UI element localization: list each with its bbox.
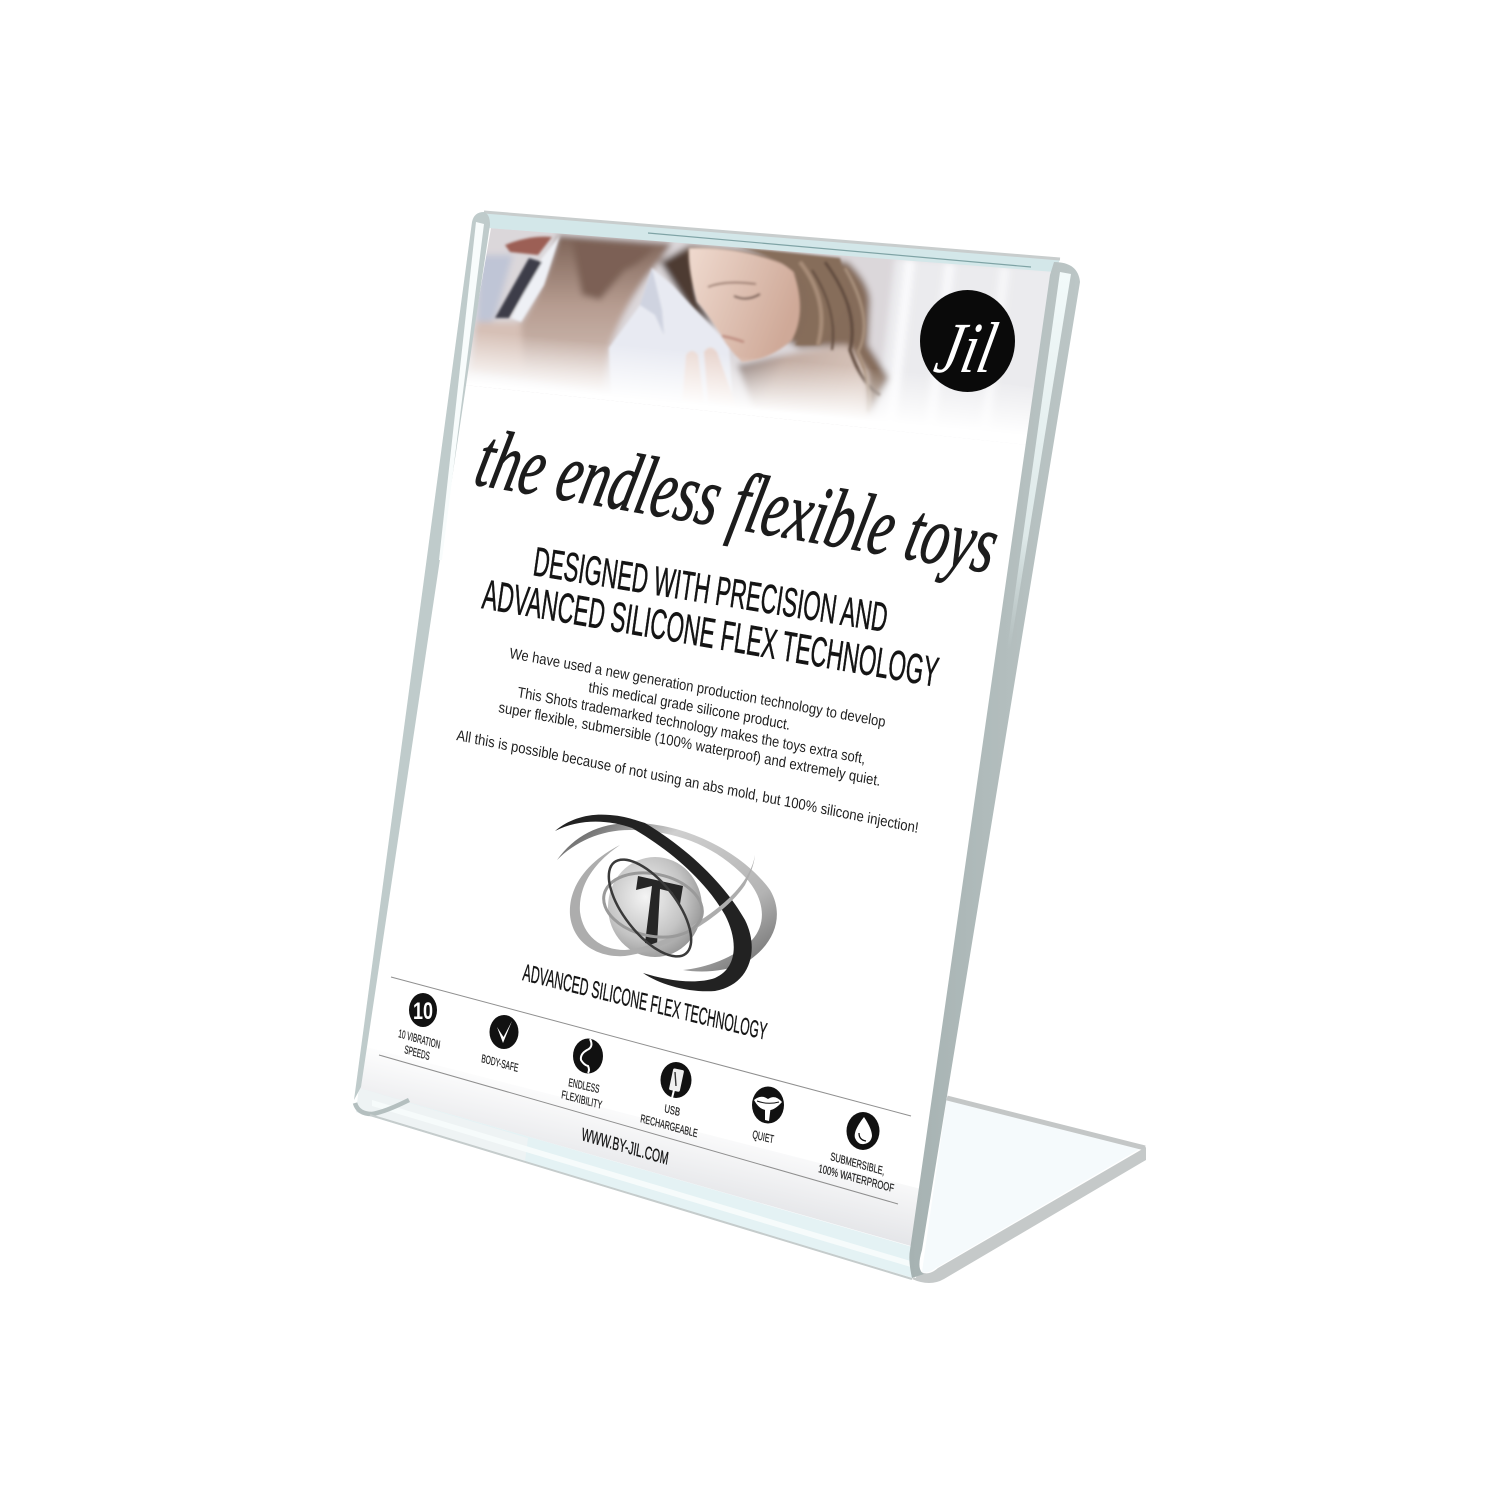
logo middle ring bbox=[570, 845, 755, 956]
feature: body-safe bbox=[481, 1015, 519, 1075]
technology logo: sphere with T and orbit rings bbox=[555, 815, 777, 991]
heading bbox=[480, 538, 942, 696]
feature: 10 vibration speeds bbox=[398, 993, 441, 1063]
sign bottom edge bbox=[370, 1115, 912, 1279]
logo black swoosh bbox=[555, 815, 752, 991]
logo caption: ADVANCED SILICONE FLEX TECHNOLOGY bbox=[521, 959, 769, 1046]
printed sign sheet bbox=[356, 215, 1080, 1278]
body text: this medical grade silicone product. bbox=[587, 679, 791, 734]
website: WWW.BY-JIL.COM bbox=[580, 1124, 670, 1169]
body text: We have used a new generation production technology to develop bbox=[508, 645, 887, 731]
feature: USB rechargeable bbox=[640, 1062, 698, 1140]
feature: USB rechargeable: RECHARGEABLE bbox=[640, 1113, 698, 1140]
logo badge: Jil: Jil bbox=[929, 308, 1004, 388]
feature: quiet: QUIET bbox=[752, 1129, 775, 1146]
feature row bottom rule bbox=[379, 1055, 898, 1204]
feature: endless flexibility: FLEXIBILITY bbox=[561, 1089, 603, 1112]
icon: water drop bbox=[846, 1112, 880, 1150]
body text: super flexible, submersible (100% waterproof) and extremely quiet. bbox=[497, 699, 882, 790]
feature: submersible: SUBMERSIBLE, bbox=[830, 1151, 885, 1178]
icon: flexible curve bbox=[573, 1038, 603, 1074]
sign top edge bbox=[484, 212, 1060, 272]
feature: endless flexibility bbox=[561, 1038, 603, 1112]
logo inner ring pale bbox=[598, 864, 708, 946]
icon: USB plug bbox=[660, 1062, 692, 1098]
feature: endless flexibility: ENDLESS bbox=[568, 1077, 600, 1096]
logo inner ring dark bbox=[594, 846, 706, 970]
logo outer silver ring bbox=[557, 823, 777, 972]
feature row top rule bbox=[391, 977, 911, 1116]
icon: 10: 10 bbox=[413, 998, 433, 1025]
feature: USB rechargeable: USB bbox=[664, 1103, 681, 1119]
icon: lips and finger bbox=[752, 1086, 784, 1124]
logo sphere bbox=[608, 857, 702, 957]
feature: quiet bbox=[752, 1086, 784, 1146]
feature: submersible: 100% WATERPROOF bbox=[818, 1163, 895, 1195]
script title: the endless flexible toys bbox=[467, 412, 1008, 591]
acrylic stand base bbox=[912, 1097, 1146, 1283]
feature: submersible bbox=[818, 1112, 895, 1195]
heading: DESIGNED WITH PRECISION AND bbox=[531, 538, 891, 641]
sign left edge bbox=[354, 212, 490, 1114]
body text: This Shots trademarked technology makes the toys extra soft, bbox=[516, 684, 866, 768]
sign right edge bbox=[909, 262, 1080, 1278]
body text bbox=[455, 645, 920, 837]
body text: All this is possible because of not using an abs mold, but 100% silicone injection! bbox=[455, 727, 920, 837]
logo badge: Jil bbox=[920, 290, 1015, 392]
feature: body-safe: BODY-SAFE bbox=[481, 1053, 519, 1075]
icon: check mark bbox=[490, 1015, 518, 1049]
feature: 10 vibration speeds: 10 VIBRATION bbox=[398, 1028, 441, 1052]
feature: 10 vibration speeds: SPEEDS bbox=[404, 1044, 431, 1063]
heading: ADVANCED SILICONE FLEX TECHNOLOGY bbox=[480, 570, 942, 696]
photo: embracing couple bbox=[466, 228, 1051, 429]
logo letter T bbox=[636, 876, 683, 945]
